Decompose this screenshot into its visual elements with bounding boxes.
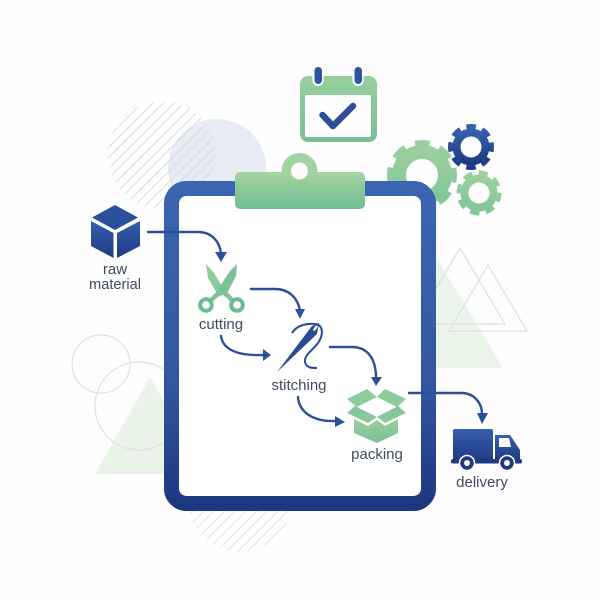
icon: open box [347, 389, 406, 443]
icon: scissors [200, 264, 243, 311]
arrow: cutting to needle top [251, 289, 305, 319]
background: hatched half circle below clipboard [190, 511, 288, 552]
label: delivery: delivery [456, 474, 508, 491]
step: raw material [89, 205, 141, 293]
workflow infographic [72, 67, 528, 552]
icon: small green gear [455, 169, 503, 217]
background: left green triangle [95, 377, 205, 474]
clipboard clip [235, 153, 365, 209]
arrow: packing to delivery [409, 393, 488, 424]
background: pale blue circle [168, 119, 266, 217]
icon: large green gear [390, 144, 454, 206]
background: outline triangles [415, 248, 527, 331]
label: raw material: material [89, 277, 141, 293]
arrow: stitching down to packing [298, 397, 345, 427]
step: delivery [451, 429, 522, 491]
icon: truck [451, 429, 522, 470]
label: cutting: cutting [199, 316, 243, 333]
step: packing [347, 389, 406, 463]
arrow: raw material to cutting [148, 232, 227, 262]
step: stitching [271, 323, 327, 394]
background: outline circles [72, 335, 183, 450]
label: packing: packing [351, 446, 403, 463]
arrow: cutting to stitching [221, 336, 271, 361]
label: raw material: raw [103, 261, 127, 278]
background: hatched circle [108, 101, 216, 209]
background: right green triangle [430, 247, 503, 368]
icon: calendar with check mark [300, 65, 377, 142]
icon: cube [91, 205, 140, 258]
icon: blue gear [450, 126, 492, 168]
label: stitching: stitching [271, 377, 327, 394]
panel: clipboard board [172, 188, 428, 504]
icon: needle and thread [277, 323, 322, 372]
arrow: stitching right to packing [330, 347, 382, 386]
step: cutting [199, 264, 243, 333]
